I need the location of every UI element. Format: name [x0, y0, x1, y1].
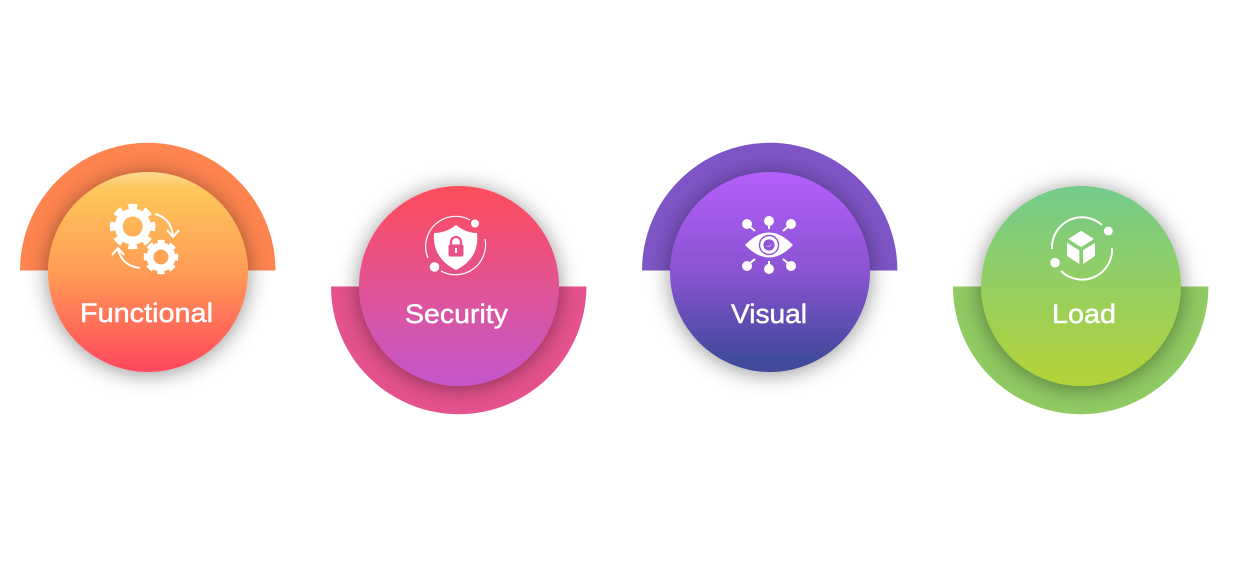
half ring: Security	[331, 286, 586, 414]
half ring: Load	[953, 286, 1208, 414]
label: Visual: Visual	[731, 299, 807, 329]
icon: gears with cycle arrows	[112, 207, 179, 272]
label: Functional: Functional	[80, 298, 213, 328]
half ring: Visual	[642, 143, 897, 270]
icon: cube with orbit	[1050, 217, 1113, 280]
circle: Security	[359, 186, 559, 386]
circle: Visual	[670, 172, 870, 372]
icon: eye with nodes	[742, 216, 796, 274]
half ring: Functional	[20, 143, 276, 270]
circle: Functional	[48, 172, 248, 372]
icon: shield with lock	[426, 216, 486, 275]
circle: Load	[981, 186, 1181, 386]
card: Visual	[642, 143, 897, 372]
card: Security	[331, 186, 586, 414]
card: Functional	[20, 143, 276, 372]
card: Load	[953, 186, 1208, 414]
label: Security: Security	[405, 299, 509, 329]
label: Load: Load	[1052, 299, 1116, 329]
